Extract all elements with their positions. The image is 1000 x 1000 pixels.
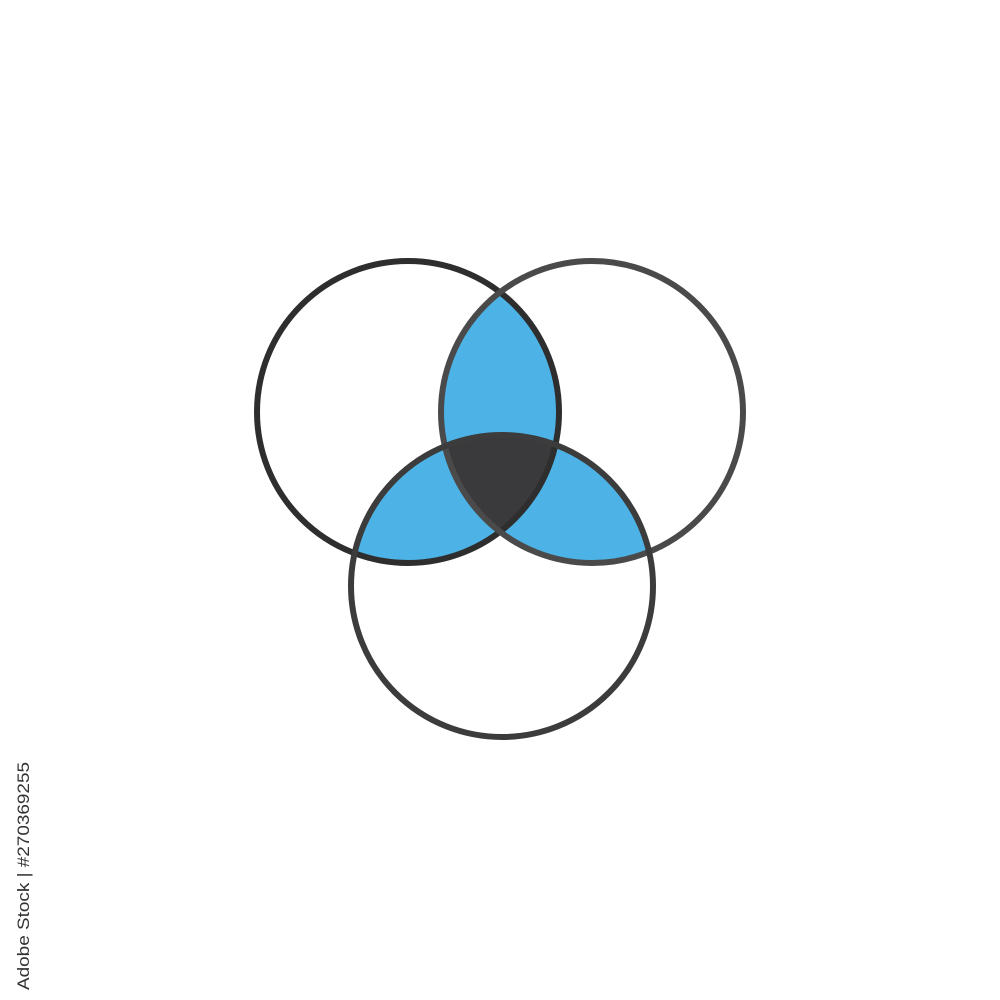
dark center intersection: [448, 438, 552, 528]
venn diagram: [17, 258, 746, 990]
circle outlines: [257, 261, 743, 737]
blue intersections: [358, 296, 646, 560]
stock id text: Adobe Stock | #270369255: [14, 762, 33, 990]
